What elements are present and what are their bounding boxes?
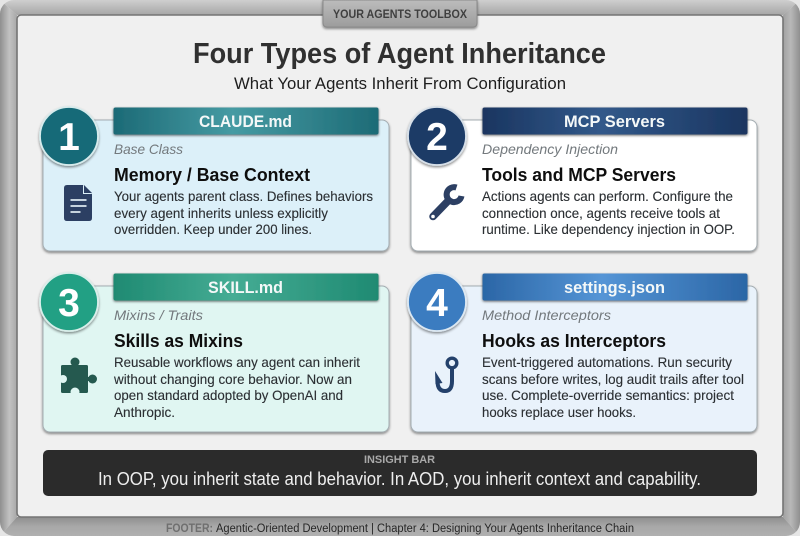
banner: SKILL.md bbox=[114, 274, 378, 300]
icon: puzzle piece bbox=[59, 358, 97, 396]
body text: scans before writes, log audit trails after tool bbox=[482, 371, 744, 387]
body text bbox=[482, 354, 744, 420]
icon: hook bbox=[435, 358, 457, 391]
body text bbox=[114, 188, 373, 237]
body text: without changing core behavior. Now an bbox=[113, 371, 352, 387]
panel: CLAUDE.md bbox=[40, 107, 389, 251]
insight bar: In OOP, you inherit state and behavior. In AOD, you inherit context and capability. bbox=[98, 468, 701, 489]
footer: Agentic-Oriented Development | Chapter 4: Designing Your Agents Inheritance Chain bbox=[216, 523, 634, 535]
body text: runtime. Like dependency injection in OOP. bbox=[482, 221, 735, 237]
panel: SKILL.md bbox=[40, 273, 389, 432]
title: Four Types of Agent Inheritance bbox=[193, 38, 606, 70]
heading: tools: Tools and MCP Servers bbox=[482, 164, 676, 185]
insight bar bbox=[43, 450, 757, 496]
number badge 4: 4 bbox=[426, 282, 448, 325]
body text bbox=[482, 188, 735, 237]
footer: FOOTER: bbox=[166, 523, 213, 535]
subtitle: base class: Base Class bbox=[114, 141, 183, 157]
insight bar: INSIGHT BAR bbox=[364, 454, 435, 466]
body text: Anthropic. bbox=[114, 404, 175, 420]
banner: CLAUDE.md: CLAUDE.md bbox=[199, 113, 292, 131]
icon: document bbox=[64, 185, 92, 221]
body text: Event-triggered automations. Run security bbox=[482, 354, 732, 370]
panel: MCP Servers bbox=[408, 107, 757, 251]
subtitle: method interceptors: Method Interceptors bbox=[482, 307, 611, 323]
body text: every agent inherits unless explicitly bbox=[114, 205, 328, 221]
number badge 2: 2 bbox=[426, 116, 448, 159]
number badge 4 bbox=[408, 273, 466, 331]
heading: skills: Skills as Mixins bbox=[114, 330, 243, 351]
top tab: your agents toolbox: YOUR AGENTS TOOLBOX bbox=[333, 7, 467, 21]
banner: settings.json bbox=[482, 274, 748, 300]
number badge 3 bbox=[40, 273, 98, 331]
body text: hooks replace user hooks. bbox=[482, 404, 636, 420]
banner: MCP Servers bbox=[482, 108, 748, 134]
top tab: your agents toolbox bbox=[323, 0, 477, 27]
heading: hooks: Hooks as Interceptors bbox=[482, 330, 666, 351]
number badge 3: 3 bbox=[58, 282, 80, 325]
subtitle: mixins: Mixins / Traits bbox=[114, 307, 203, 323]
body text: overridden. Keep under 200 lines. bbox=[114, 221, 312, 237]
body text bbox=[113, 354, 360, 420]
heading: memory: Memory / Base Context bbox=[114, 164, 310, 185]
banner: MCP Servers: MCP Servers bbox=[564, 113, 665, 131]
body text: Actions agents can perform. Configure the bbox=[482, 188, 733, 204]
banner: settings.json: settings.json bbox=[564, 279, 665, 297]
body text: Your agents parent class. Defines behaviors bbox=[114, 188, 373, 204]
body text: connection once, agents receive tools at bbox=[482, 205, 720, 221]
icon: wrench bbox=[431, 187, 462, 218]
banner: CLAUDE.md bbox=[114, 108, 378, 134]
subtitle: What Your Agents Inherit From Configuration bbox=[234, 74, 566, 93]
body text: use. Complete-override semantics: project bbox=[482, 387, 734, 403]
number badge 1: 1 bbox=[58, 116, 80, 159]
panel: settings.json bbox=[408, 273, 757, 432]
banner: SKILL.md: SKILL.md bbox=[208, 279, 283, 297]
body text: open standard adopted by OpenAI and bbox=[114, 387, 343, 403]
number badge 2 bbox=[408, 107, 466, 165]
number badge 1 bbox=[40, 107, 98, 165]
subtitle: dependency injection: Dependency Injection bbox=[482, 141, 618, 157]
body text: Reusable workflows any agent can inherit bbox=[114, 354, 360, 370]
